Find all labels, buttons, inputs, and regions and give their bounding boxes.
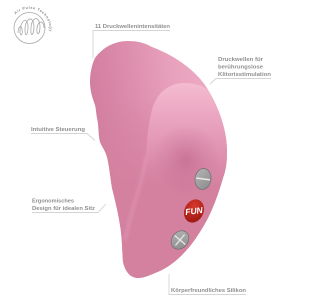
label: ergonomic design: Design für idealen Sitz: [32, 206, 95, 212]
label: pressure wave intensities: 11 Druckwellenintensitäten: [95, 24, 171, 30]
lower body shading: [98, 122, 227, 278]
raised lobe: [146, 83, 227, 174]
label: body-friendly silicone: [169, 274, 247, 294]
lobe shadow: [165, 134, 208, 178]
label: contactless stimulation: Klitorisstimulation: [218, 72, 272, 78]
label: ergonomic design: [32, 198, 106, 212]
logo lettering: Air Pulse Technology: [14, 6, 52, 32]
logo wave: [18, 19, 44, 35]
label: intuitive control: [31, 127, 95, 140]
button: FUN logo: FUN: [185, 205, 204, 217]
button: plus: [167, 227, 193, 253]
product body: [85, 38, 230, 280]
label: body-friendly silicone: Körperfreundliches Silikon: [171, 288, 247, 294]
label: intuitive control: Intuitive Steuerung: [31, 127, 86, 133]
label: contactless stimulation: Druckwellen für: [218, 57, 264, 63]
icon: air pulse technology logo: [14, 6, 52, 44]
label: contactless stimulation: berührungslose: [218, 64, 263, 70]
label: pressure wave intensities: [93, 24, 171, 58]
button: FUN logo: [180, 196, 209, 226]
button: minus: [194, 167, 212, 191]
label: contactless stimulation: [210, 57, 272, 84]
label: ergonomic design: Ergonomisches: [32, 198, 74, 204]
crease highlight: [125, 171, 144, 238]
